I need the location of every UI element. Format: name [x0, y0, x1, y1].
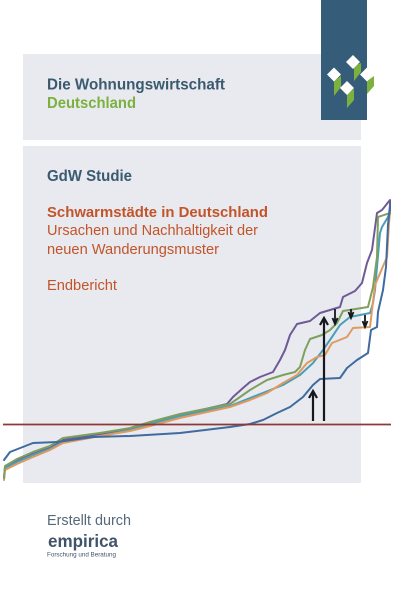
panel: publisher header	[23, 54, 361, 140]
curve: orange	[4, 212, 390, 480]
arrows: change markers	[309, 309, 368, 421]
label: final report: Endbericht	[47, 277, 118, 294]
arrow: down right	[362, 315, 368, 327]
subtitle	[47, 222, 258, 258]
credit: author	[47, 512, 131, 558]
curve: blue	[4, 205, 390, 460]
text: created by: Erstellt durch	[47, 512, 131, 529]
heading: publisher name: Die Wohnungswirtschaft	[47, 76, 226, 94]
title: study name: Schwarmstädte in Deutschland	[47, 204, 268, 221]
panel: study title	[23, 146, 361, 483]
text: tagline: Forschung und Beratung	[47, 552, 116, 558]
curve: purple	[4, 200, 390, 478]
logo: empirica: empirica	[48, 531, 118, 551]
reference line	[3, 424, 391, 426]
label: study type: GdW Studie	[47, 168, 132, 185]
arrow: down left	[332, 309, 338, 324]
subtitle: neuen Wanderungsmuster	[47, 241, 219, 258]
arrow: down middle	[348, 309, 354, 318]
icon: cube right	[360, 68, 374, 94]
curve: green	[4, 213, 390, 478]
icon: cube top	[346, 55, 361, 81]
line chart: migration curves	[4, 200, 390, 480]
icon: cube left	[327, 68, 341, 96]
subtitle: Ursachen und Nachhaltigkeit der	[47, 222, 258, 239]
curve: teal	[4, 212, 390, 478]
arrow: short up	[309, 391, 317, 421]
arrow: tall up	[320, 318, 328, 421]
logo: blue ribbon with cubes	[321, 0, 374, 120]
icon: cube bottom	[340, 81, 354, 108]
heading: country: Deutschland	[47, 95, 136, 112]
